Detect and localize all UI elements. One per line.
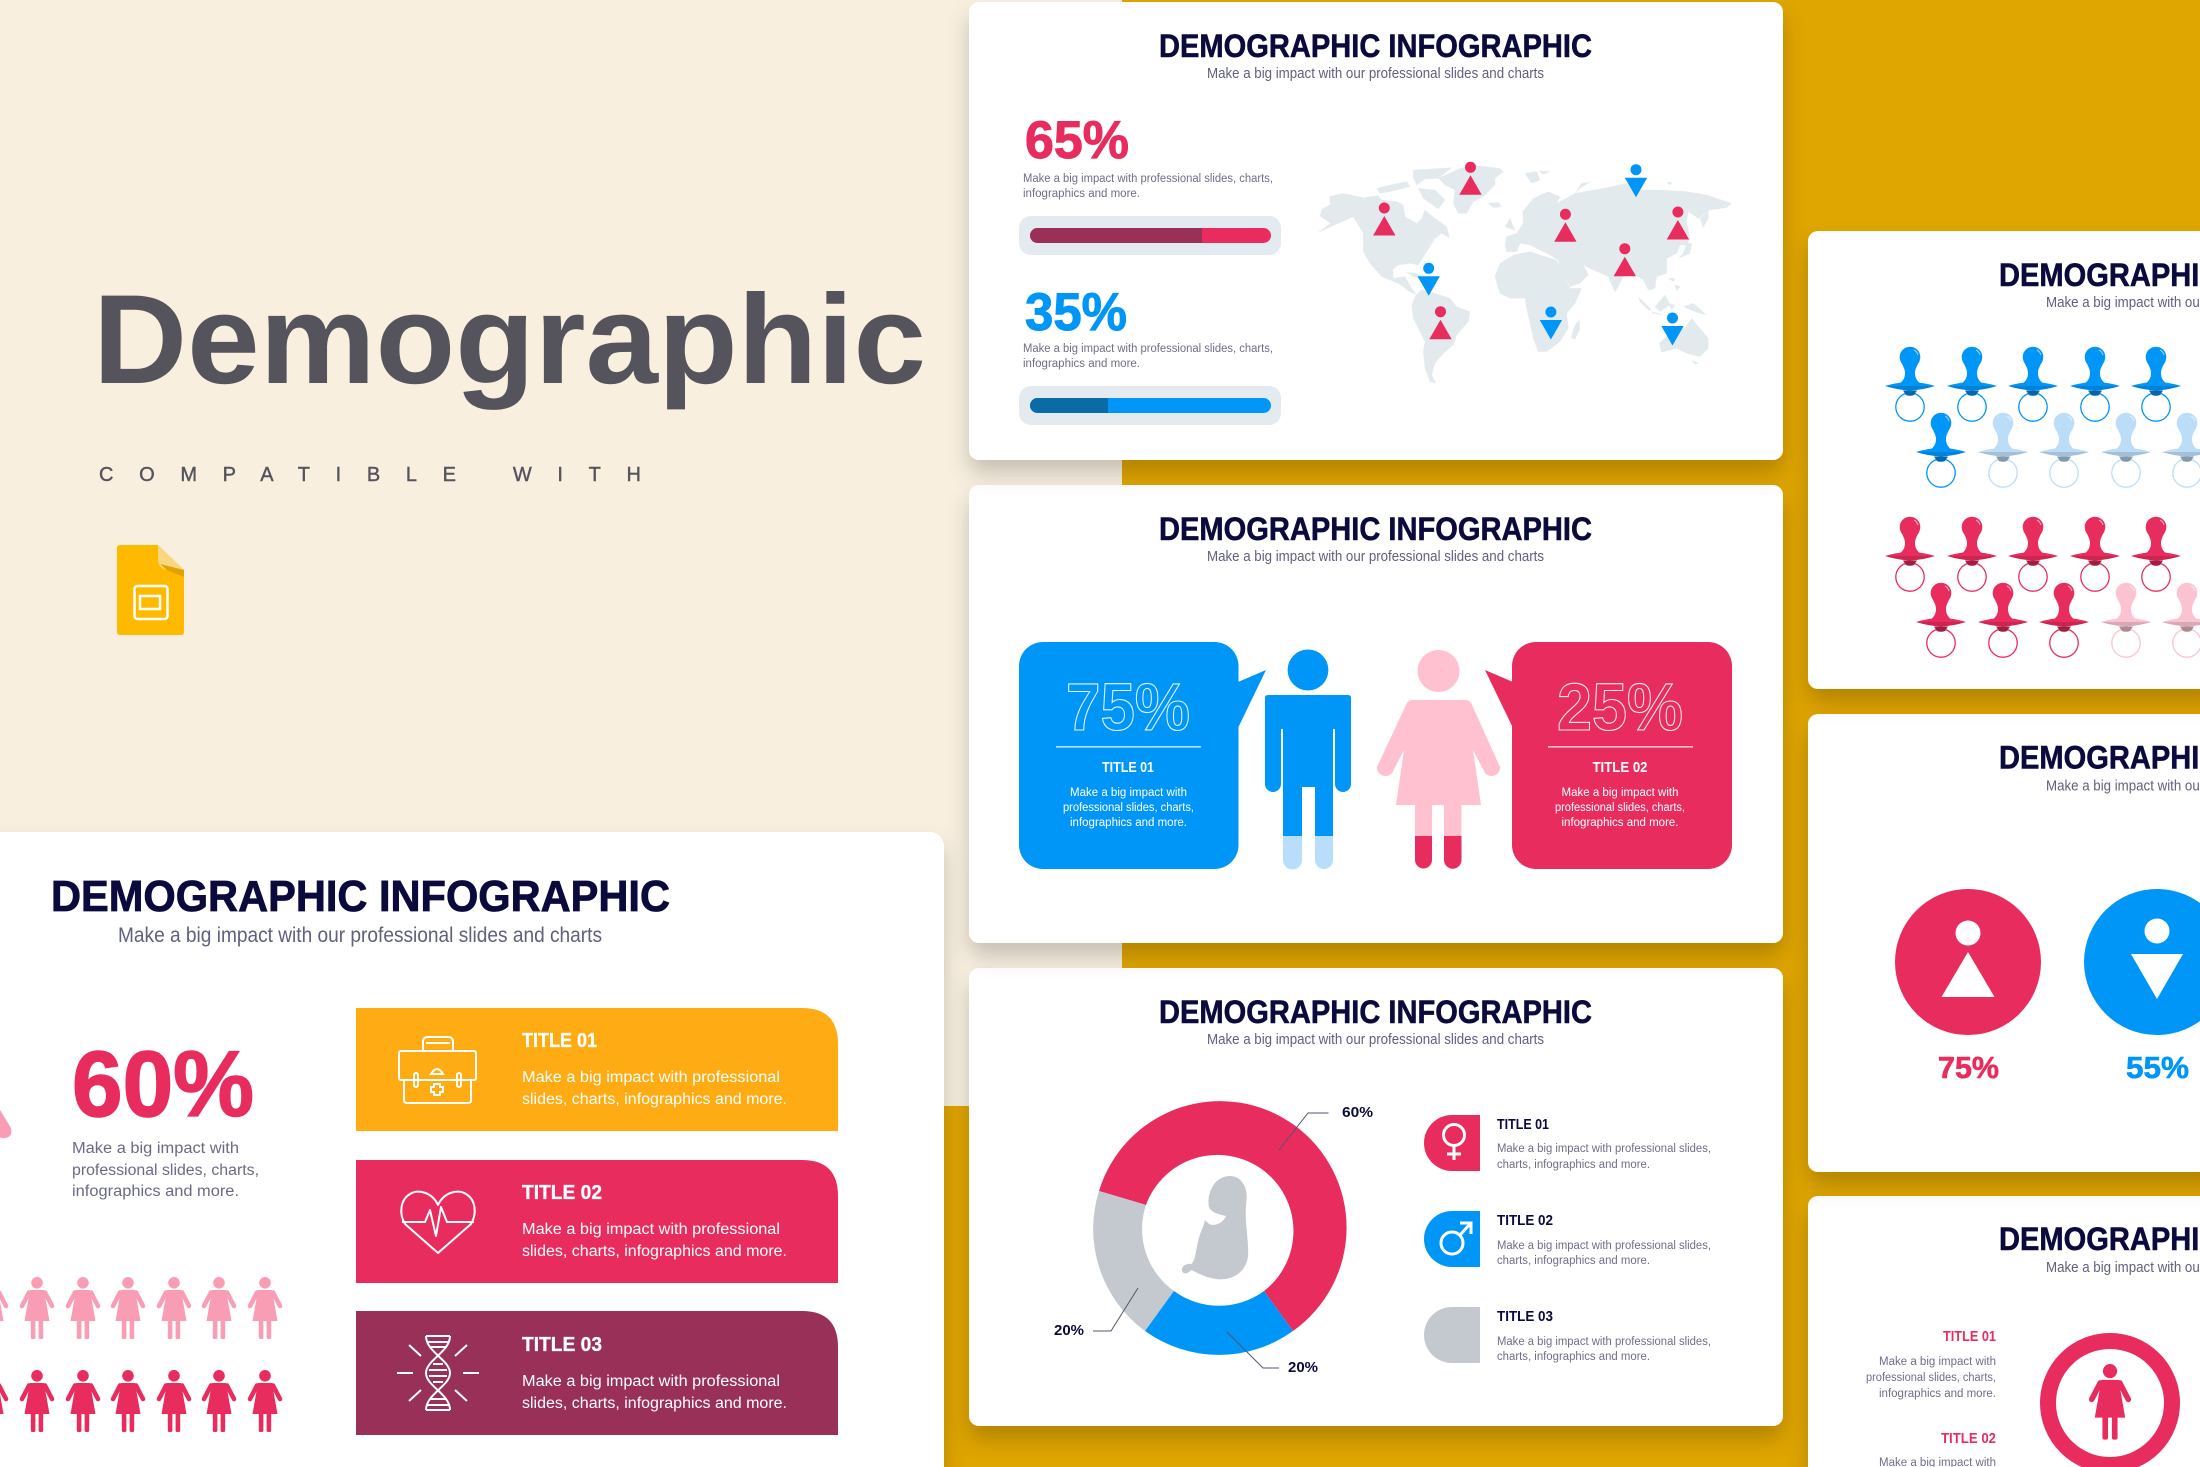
pacifiers: pink bbox=[1885, 517, 2200, 657]
heading: DEMOGRAPHIC INFOGRAPHIC bbox=[1159, 28, 1592, 64]
statistic: 60%: 60% bbox=[72, 1032, 254, 1136]
description 35% bbox=[1023, 343, 1273, 370]
description 65%: Make a big impact with professional slides, charts, bbox=[1023, 173, 1273, 185]
leader: left 20% bbox=[1093, 1288, 1138, 1331]
pacifiers: blue bbox=[1885, 347, 2200, 487]
text bbox=[1497, 1336, 1711, 1363]
text: charts, infographics and more. bbox=[1497, 1159, 1650, 1171]
text: Make a big impact with professional slides, bbox=[1497, 1240, 1711, 1252]
figure: man bbox=[1265, 650, 1351, 870]
subtitle: compatible with: COMPATIBLE WITH bbox=[99, 464, 641, 486]
progress bar 35% bbox=[1019, 386, 1281, 425]
card text: Make a big impact with professional bbox=[522, 1221, 780, 1238]
label: left 20%: 20% bbox=[1054, 1323, 1084, 1339]
description: infographics and more. bbox=[72, 1183, 239, 1200]
card text: slides, charts, infographics and more. bbox=[522, 1243, 787, 1260]
statistic: 65%: 65% bbox=[1025, 111, 1129, 170]
map markers bbox=[1373, 162, 1689, 346]
description 65%: infographics and more. bbox=[1023, 188, 1140, 200]
block: title 01 bbox=[1866, 1329, 1996, 1400]
card title: TITLE 01 bbox=[522, 1030, 597, 1052]
text: Make a big impact with bbox=[1070, 787, 1187, 799]
statistic: 55%: 55% bbox=[2126, 1050, 2189, 1085]
figure: woman bbox=[1377, 650, 1500, 869]
title: TITLE 03 bbox=[1497, 1309, 1553, 1325]
icon: DNA helix bbox=[397, 1336, 479, 1410]
icon: medical case bbox=[399, 1037, 476, 1103]
description: professional slides, charts, bbox=[72, 1162, 259, 1179]
label: 60%: 60% bbox=[1342, 1105, 1373, 1121]
label: bottom 20%: 20% bbox=[1288, 1360, 1318, 1376]
subheading: Make a big impact with our professional slides and charts bbox=[1207, 1032, 1544, 1048]
leader: bottom 20% bbox=[1227, 1332, 1279, 1368]
text bbox=[1497, 1143, 1711, 1171]
text: infographics and more. bbox=[1562, 817, 1678, 829]
panel: donut chart slide bbox=[969, 968, 1783, 1426]
icon: heart with pulse bbox=[401, 1192, 475, 1253]
card title: TITLE 02 bbox=[522, 1182, 602, 1204]
large figure arm fragment bbox=[0, 1100, 11, 1138]
subheading: Make a big impact with our professional slides and charts bbox=[1207, 549, 1544, 565]
legend item: female bbox=[1424, 1115, 1711, 1171]
world map bbox=[1318, 165, 1732, 383]
description 35%: infographics and more. bbox=[1023, 358, 1140, 370]
card text bbox=[522, 1373, 787, 1412]
block: title 02 bbox=[1879, 1431, 1996, 1467]
text: charts, infographics and more. bbox=[1497, 1351, 1650, 1363]
text: charts, infographics and more. bbox=[1497, 1255, 1650, 1267]
main title: Demographic bbox=[93, 268, 926, 410]
card: title 03 bbox=[356, 1311, 838, 1435]
legend item: unknown bbox=[1424, 1307, 1711, 1363]
callout: blue 75% bbox=[1019, 642, 1266, 869]
title: TITLE 01 bbox=[1497, 1117, 1549, 1133]
card: title 01 bbox=[356, 1008, 838, 1131]
description bbox=[72, 1140, 259, 1200]
card title: TITLE 03 bbox=[522, 1334, 602, 1356]
text bbox=[1555, 787, 1685, 829]
panel: bottom-left slide with 60% statistic bbox=[0, 832, 944, 1467]
text: Make a big impact with bbox=[1562, 787, 1678, 799]
block: title 01: Make a big impact with bbox=[1879, 1356, 1996, 1368]
text: professional slides, charts, bbox=[1063, 802, 1194, 814]
legend item: male bbox=[1424, 1211, 1711, 1267]
card text: slides, charts, infographics and more. bbox=[522, 1091, 787, 1108]
title: TITLE 02 bbox=[1497, 1213, 1553, 1229]
card text: Make a big impact with professional bbox=[522, 1373, 780, 1390]
heading: DEMOGRAPHIC INFOGRAPHIC bbox=[1159, 511, 1592, 547]
text: professional slides, charts, bbox=[1555, 802, 1685, 814]
heading: DEMOGRAPHIC INFOGRAPHIC bbox=[1159, 994, 1592, 1030]
title: TITLE 01 bbox=[1102, 759, 1154, 776]
leader: 60% bbox=[1279, 1113, 1328, 1150]
icon: Google Slides file bbox=[117, 545, 184, 635]
people row: light bbox=[0, 1277, 280, 1339]
panel: male and female callouts slide bbox=[969, 485, 1783, 943]
ring with woman icon bbox=[2048, 1341, 2172, 1465]
panel: world map slide bbox=[969, 2, 1783, 460]
statistic: 35%: 35% bbox=[1025, 283, 1127, 342]
text: Make a big impact with professional slides, bbox=[1497, 1336, 1711, 1348]
card: title 02 bbox=[356, 1160, 838, 1283]
people row: dark bbox=[0, 1370, 280, 1432]
panel: pacifier counts slide bbox=[1808, 231, 2200, 689]
text bbox=[1497, 1240, 1711, 1267]
panel: ring and titles slide bbox=[1808, 1196, 2200, 1467]
outlined figure: 25% bbox=[1557, 670, 1683, 745]
text bbox=[1063, 787, 1194, 829]
callout: pink 25% bbox=[1485, 642, 1732, 869]
heading: DEMOGRAPHIC INFOGRAPHIC bbox=[51, 872, 670, 921]
progress bar 65% bbox=[1019, 216, 1281, 255]
description: Make a big impact with bbox=[72, 1140, 239, 1157]
donut chart bbox=[1093, 1101, 1347, 1368]
card text bbox=[522, 1221, 787, 1260]
circle: female bbox=[1895, 889, 2041, 1035]
outlined figure: 75% bbox=[1066, 670, 1190, 745]
subheading: Make a big impact with our professional slides and charts bbox=[118, 924, 602, 947]
statistic: 75%: 75% bbox=[1938, 1050, 1999, 1085]
circle: male bbox=[2084, 889, 2200, 1035]
card text: slides, charts, infographics and more. bbox=[522, 1395, 787, 1412]
description 35%: Make a big impact with professional slides, charts, bbox=[1023, 343, 1273, 355]
description 65% bbox=[1023, 173, 1273, 200]
block: title 01: infographics and more. bbox=[1879, 1388, 1996, 1400]
title: TITLE 02 bbox=[1592, 759, 1648, 776]
icon: female symbol bbox=[1444, 1124, 1464, 1160]
icon: male symbol bbox=[1441, 1223, 1471, 1254]
panel: gender percent circles slide bbox=[1808, 714, 2200, 1172]
card text: Make a big impact with professional bbox=[522, 1069, 780, 1086]
block: title 01: TITLE 01 bbox=[1943, 1329, 1996, 1345]
icon: fetus bbox=[1182, 1176, 1248, 1279]
block: title 01: professional slides, charts, bbox=[1866, 1372, 1996, 1384]
text: Make a big impact with professional slides, bbox=[1497, 1143, 1711, 1155]
text: infographics and more. bbox=[1070, 817, 1187, 829]
block: title 02: TITLE 02 bbox=[1941, 1431, 1996, 1447]
subheading: Make a big impact with our professional slides and charts bbox=[1207, 66, 1544, 82]
card text bbox=[522, 1069, 787, 1108]
